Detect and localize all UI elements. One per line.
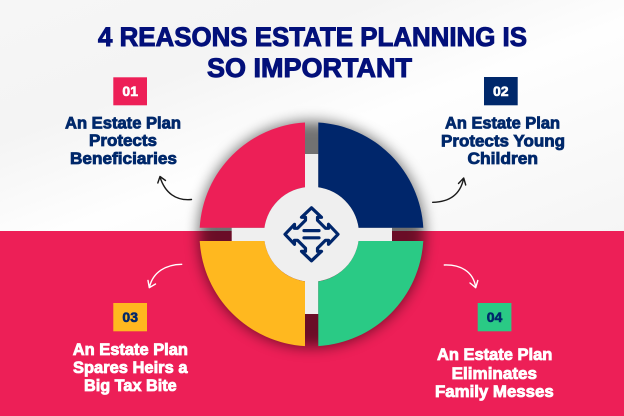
icon: four-way arrows <box>285 208 338 261</box>
heading: reason 01: Beneficiaries <box>70 150 177 168</box>
heading: reason 03: Spares Heirs a <box>73 359 188 377</box>
heading: reason 03: An Estate Plan <box>73 341 188 359</box>
segment: top-left red <box>200 122 305 228</box>
heading: reason 01 <box>65 114 181 168</box>
panel: reason 02 <box>441 77 565 168</box>
badge 03: 03 <box>122 309 138 325</box>
segment: bottom-right green <box>318 241 423 346</box>
drop shadow <box>198 121 424 347</box>
heading: reason 01: Protects <box>89 132 157 150</box>
chart: four-segment circular diagram <box>198 121 424 347</box>
heading: reason 02: An Estate Plan <box>445 114 560 132</box>
badge 01: 01 <box>122 83 138 99</box>
heading: reason 01: An Estate Plan <box>65 114 181 132</box>
heading: reason 02: Protects Young <box>441 132 565 150</box>
panel: reason 03 <box>73 303 188 395</box>
heading: reason 04 <box>435 346 554 401</box>
centre cross <box>232 154 392 314</box>
heading: reason 04: Eliminates <box>452 365 537 383</box>
badge 02: 02 <box>493 83 509 99</box>
segment: bottom-left yellow <box>200 241 305 346</box>
badge 04: 04 <box>487 309 502 325</box>
background: light upper area <box>0 0 624 232</box>
arrow: to reason 03 <box>148 264 182 288</box>
title: SO IMPORTANT <box>207 53 412 83</box>
arrow: to reason 02 <box>433 178 466 202</box>
panel: reason 01 <box>65 77 181 168</box>
segment: top-right navy <box>318 122 423 228</box>
heading: reason 04: Family Messes <box>435 383 554 401</box>
title <box>98 22 527 83</box>
heading: reason 04: An Estate Plan <box>437 346 552 364</box>
centre circle <box>264 187 359 282</box>
arrow: to reason 01 <box>158 176 192 200</box>
heading: reason 02 <box>441 114 565 168</box>
arrow: to reason 04 <box>444 265 478 288</box>
heading: reason 03: Big Tax Bite <box>84 377 177 395</box>
background: red lower band <box>0 231 624 416</box>
heading: reason 02: Children <box>468 150 538 168</box>
panel: reason 04 <box>435 303 554 401</box>
heading: reason 03 <box>73 341 188 395</box>
title: 4 REASONS ESTATE PLANNING IS <box>98 22 527 52</box>
